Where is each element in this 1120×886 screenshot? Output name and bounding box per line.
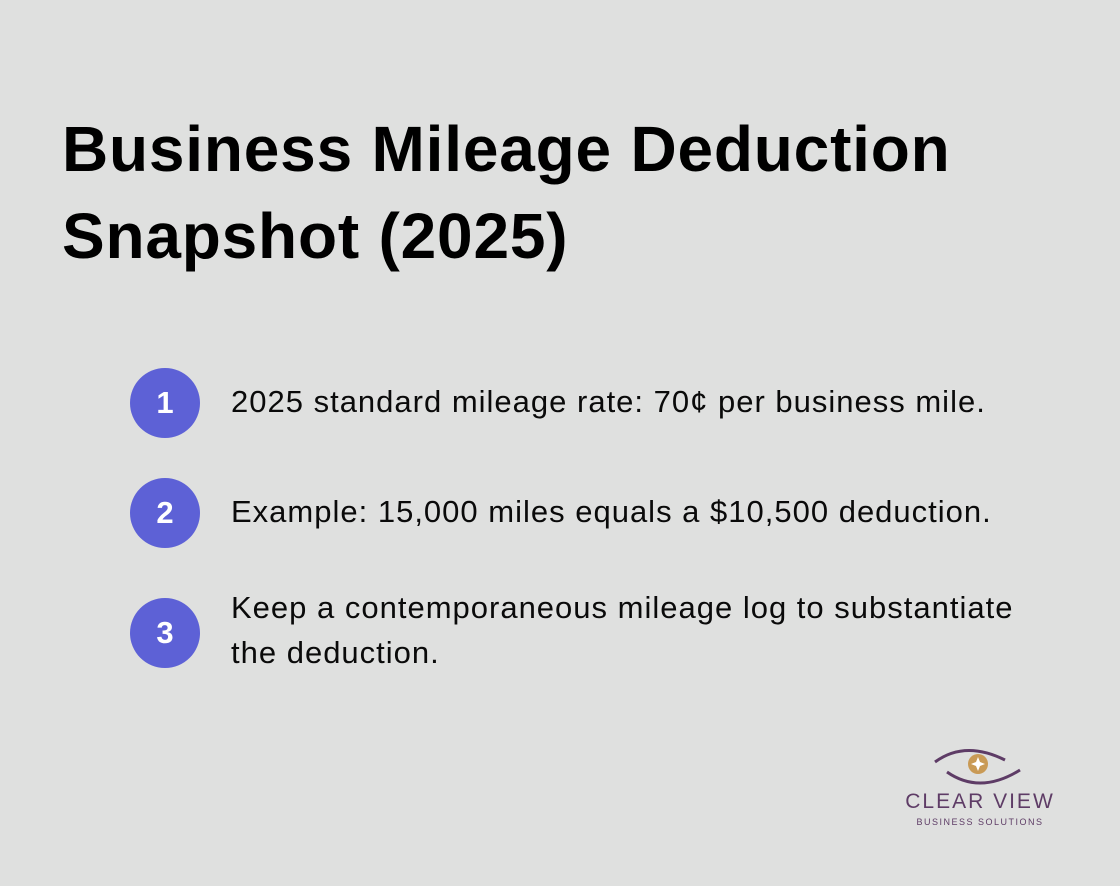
logo text: CLEAR VIEW (905, 790, 1055, 813)
icon: eye (934, 749, 1021, 784)
title: Business Mileage Deduction (62, 113, 951, 185)
logo: BUSINESS SOLUTIONS (916, 817, 1044, 827)
number badge 3: 3 (156, 615, 174, 650)
number badge 1: 1 (156, 385, 174, 420)
number badge 1 (130, 368, 200, 438)
title (62, 113, 951, 272)
title: Snapshot (2025) (62, 200, 568, 272)
number badge 2 (130, 478, 200, 548)
number badge 2: 2 (156, 495, 174, 530)
text 2: Example: 15,000 miles equals a $10,500 deduction. (231, 494, 992, 529)
item 2 (130, 478, 992, 548)
number badge 3 (130, 598, 200, 668)
item 3 (130, 590, 1013, 670)
text 3 (231, 590, 1013, 670)
text 3: the deduction. (231, 635, 440, 670)
text 1: 2025 standard mileage rate: 70¢ per business mile. (231, 384, 986, 419)
logo (905, 749, 1055, 827)
text 3: Keep a contemporaneous mileage log to substantiate (231, 590, 1013, 625)
item 1 (130, 368, 986, 438)
